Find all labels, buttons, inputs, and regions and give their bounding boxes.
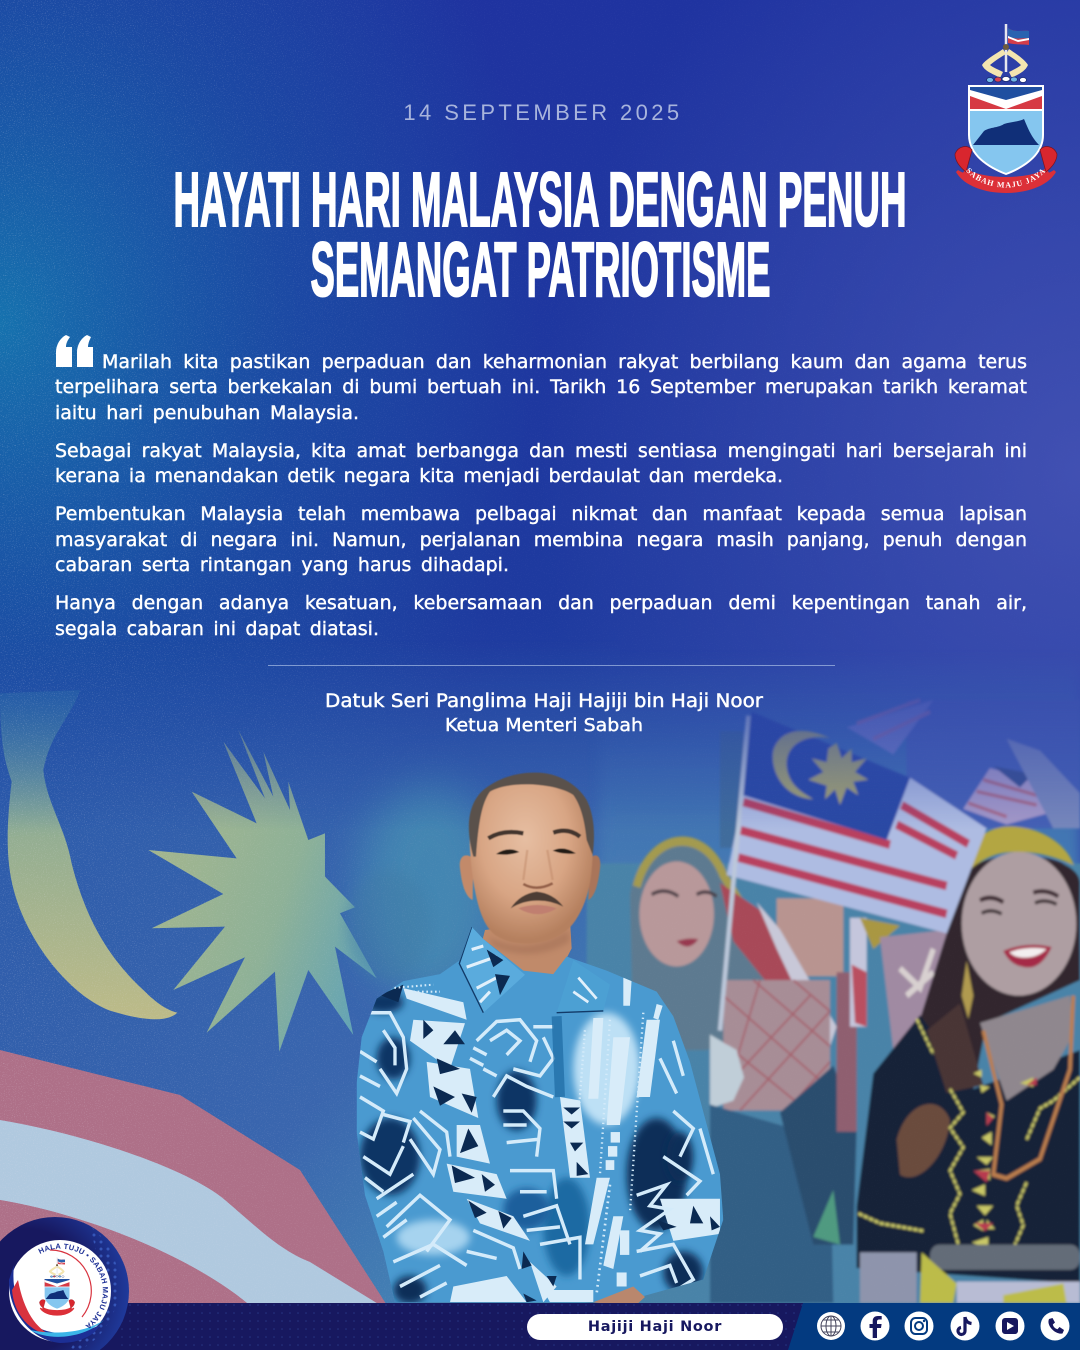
signature: name and title [325, 691, 764, 736]
white geometric blocks [403, 978, 720, 1302]
text block: quote paragraphs: Marilah kita pastikan perpaduan dan keharmonian rakyat berbilang kaum dan agama terus [102, 351, 1027, 373]
portrait: man in blue batik shirt [356, 772, 724, 1303]
icon: phone [1040, 1312, 1070, 1340]
icon: quotation mark [56, 335, 93, 367]
footer bar [0, 1303, 1080, 1350]
head and neck [460, 773, 600, 990]
crest: Sabah coat of arms: SABAH MAJU JAYA [966, 168, 1046, 188]
signature: name and title: Datuk Seri Panglima Haji Hajiji bin Haji Noor [325, 691, 763, 712]
signature: name and title: Ketua Menteri Sabah [445, 716, 643, 736]
moustache [511, 892, 563, 908]
lips [518, 905, 557, 914]
text block: quote paragraphs: masyarakat di negara ini. Namun, perjalanan membina negara masih panjang, penuh dengan [55, 529, 1027, 551]
social icons [817, 1312, 1070, 1340]
name pill [527, 1314, 783, 1340]
crest: Sabah coat of arms [954, 24, 1058, 193]
badge: Hala Tuju Sabah Maju Jaya logo [0, 1217, 129, 1350]
icon: video [996, 1312, 1024, 1340]
collar [459, 927, 525, 1013]
nose [523, 883, 553, 888]
icon: facebook [860, 1312, 890, 1340]
right scene [602, 685, 1080, 864]
text block: quote paragraphs: Pembentukan Malaysia telah membawa pelbagai nikmat dan manfaat kepada semua lapisan [55, 503, 1027, 525]
face [470, 774, 593, 944]
text block: quote paragraphs [55, 351, 1027, 640]
text block: quote paragraphs: segala cabaran ini dapat diatasi. [55, 618, 379, 640]
name pill: Hajiji Haji Noor [588, 1319, 722, 1335]
dark triangles [380, 985, 720, 1302]
date: 14 SEPTEMBER 2025 [403, 100, 683, 125]
icon: instagram [904, 1312, 934, 1340]
text block: quote paragraphs: kerana ia menandakan detik negara kita menjadi berdaulat dan merdeka. [55, 465, 783, 487]
light line pattern [360, 985, 713, 1301]
shirt [356, 927, 724, 1303]
text block: quote paragraphs: iaitu hari penubuhan Malaysia. [55, 402, 359, 424]
icon: tiktok [950, 1312, 980, 1340]
text block: quote paragraphs: Sebagai rakyat Malaysia, kita amat berbangga dan mesti sentiasa mengingati hari bersejarah ini [55, 440, 1027, 462]
right dancer [920, 856, 1080, 1089]
left dancer [630, 845, 764, 1050]
title [174, 157, 906, 313]
left flag [0, 640, 620, 1310]
brows [488, 832, 523, 838]
text block: quote paragraphs: Hanya dengan adanya kesatuan, kebersamaan dan perpaduan demi kepentingan tanah air, [55, 592, 1027, 614]
hair [469, 773, 594, 857]
ears [460, 855, 473, 900]
waving flag [727, 778, 987, 933]
hand [593, 1286, 645, 1308]
text block: quote paragraphs: terpelihara serta berkekalan di bumi bertuah ini. Tarikh 16 September merupakan tarikh keramat [55, 376, 1027, 398]
badge: Hala Tuju Sabah Maju Jaya logo: HALA TUJU • SABAH MAJU JAYA [38, 1244, 108, 1328]
text block: quote paragraphs: cabaran serta rintangan yang harus dihadapi. [55, 554, 509, 576]
eyes [496, 849, 519, 855]
icon: web [817, 1312, 845, 1340]
